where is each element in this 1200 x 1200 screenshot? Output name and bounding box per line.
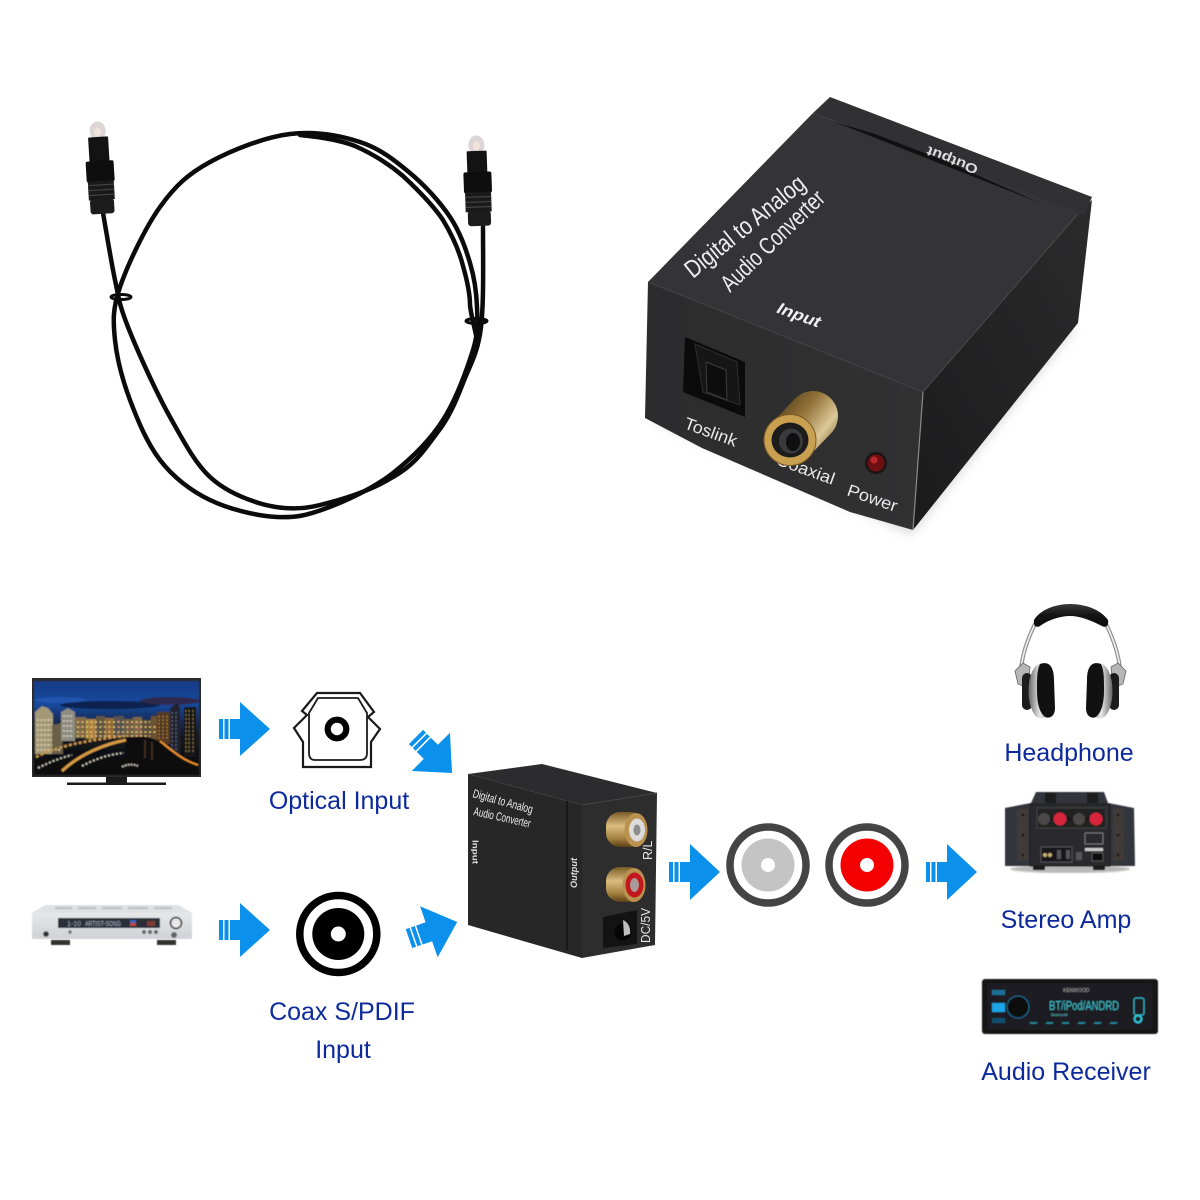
- volume knob: [1007, 996, 1029, 1018]
- drop shadow: [650, 320, 1075, 535]
- silver AV receiver source: ARTIST-SONG: [85, 919, 121, 928]
- arrow: receiver to coax: [219, 903, 270, 957]
- stereo amplifier: [1005, 792, 1135, 873]
- arrow: RCA to outputs: [926, 844, 977, 900]
- top print: product name: Digital to Analog: [679, 169, 811, 284]
- Toslink port: [683, 337, 745, 417]
- TV stand: [67, 777, 166, 785]
- left plug: [83, 121, 117, 215]
- Output label: Output: [569, 857, 580, 888]
- arrow: coax to converter: [400, 896, 466, 964]
- rear face: [582, 793, 657, 958]
- USB slot: [1134, 998, 1144, 1015]
- icon: optical port: [294, 693, 380, 767]
- rear lip: [813, 97, 1092, 214]
- receiver chassis: [32, 905, 192, 939]
- lip slot: [835, 122, 1040, 203]
- DC jack: [603, 910, 637, 948]
- rear inputs: [1041, 847, 1072, 862]
- amp top vents: [1045, 793, 1098, 803]
- arms: [1021, 624, 1120, 668]
- power LED: [865, 452, 887, 474]
- receiver body: [982, 979, 1158, 1034]
- label: Stereo Amp: Stereo Amp: [1001, 906, 1131, 934]
- brand: KENWOOD: [1063, 988, 1090, 994]
- label: Coax S/PDIF Input: [269, 998, 415, 1064]
- R/L label: R/L: [641, 840, 655, 860]
- white RCA socket: [606, 812, 648, 847]
- label: Coax S/PDIF Input: Input: [315, 1036, 371, 1064]
- TV frame: [32, 678, 201, 777]
- Input label: Input: [773, 300, 826, 331]
- optical fibre cable: [83, 121, 493, 517]
- DC/5V label: DC/5V: [639, 907, 653, 943]
- TV screen city at night: [34, 681, 200, 775]
- car audio receiver: [982, 979, 1158, 1034]
- top print: product name: Audio Converter: [715, 185, 831, 297]
- receiver controls: [170, 918, 182, 928]
- front face: [645, 282, 923, 530]
- amp shadow: [1010, 865, 1130, 873]
- panel seam: [566, 801, 568, 950]
- cable loop strands: [103, 133, 483, 517]
- coaxial gold connector: [764, 414, 816, 466]
- receiver buttons: [992, 990, 1005, 995]
- TV source: [32, 678, 201, 785]
- Coaxial label: Coaxial: [774, 450, 837, 489]
- red RCA socket: [606, 867, 646, 902]
- long side face: [468, 774, 582, 958]
- speaker terminals: [1037, 808, 1106, 828]
- receiver feet: [51, 940, 176, 945]
- cable retaining rings: [111, 294, 487, 324]
- amp feet: [1033, 866, 1105, 870]
- icon: coax port: [300, 896, 377, 972]
- amp handles: [1017, 809, 1124, 861]
- Output label: Output: [924, 143, 980, 177]
- label: Headphone: Headphone: [1004, 739, 1134, 767]
- right ear cup: [1086, 663, 1126, 718]
- arrow: optical to converter: [397, 718, 471, 792]
- Toslink label: Toslink: [682, 414, 740, 451]
- icon: headphones: [1015, 604, 1126, 718]
- small converter rear view: [468, 764, 657, 958]
- label: Audio Receiver: Audio Receiver: [981, 1058, 1151, 1086]
- printed name: Audio Converter: [472, 804, 532, 830]
- main converter product photo: [645, 97, 1092, 535]
- label: Coax S/PDIF Input: Coax S/PDIF: [269, 998, 415, 1026]
- silver AV receiver source: 1-10: [67, 921, 81, 928]
- display: BT/iPod/ANDRD: [1049, 999, 1119, 1013]
- arrow: TV to optical: [219, 702, 270, 756]
- top face: [468, 764, 657, 805]
- printed name: Digital to Analog: [471, 786, 535, 816]
- label: Optical Input: Optical Input: [269, 787, 409, 815]
- icon: red RCA output: [829, 827, 905, 903]
- arrow: converter to RCA: [669, 844, 720, 900]
- receiver display: [58, 918, 160, 928]
- top face: [648, 113, 1085, 392]
- side face: [913, 200, 1092, 530]
- silver AV receiver source: [32, 905, 192, 945]
- water: [125, 737, 198, 775]
- left ear cup: [1015, 663, 1055, 718]
- Input label: Input: [470, 840, 480, 864]
- edge highlights: [913, 392, 923, 530]
- right plug: [462, 135, 493, 226]
- amp body: [1005, 792, 1135, 866]
- headband: [1034, 604, 1108, 627]
- icon: white RCA output: [730, 827, 806, 903]
- printed name: [471, 786, 535, 830]
- car audio receiver: Bluetooth: [1051, 1012, 1068, 1017]
- shore lights: [160, 741, 198, 765]
- Power label: Power: [845, 481, 900, 516]
